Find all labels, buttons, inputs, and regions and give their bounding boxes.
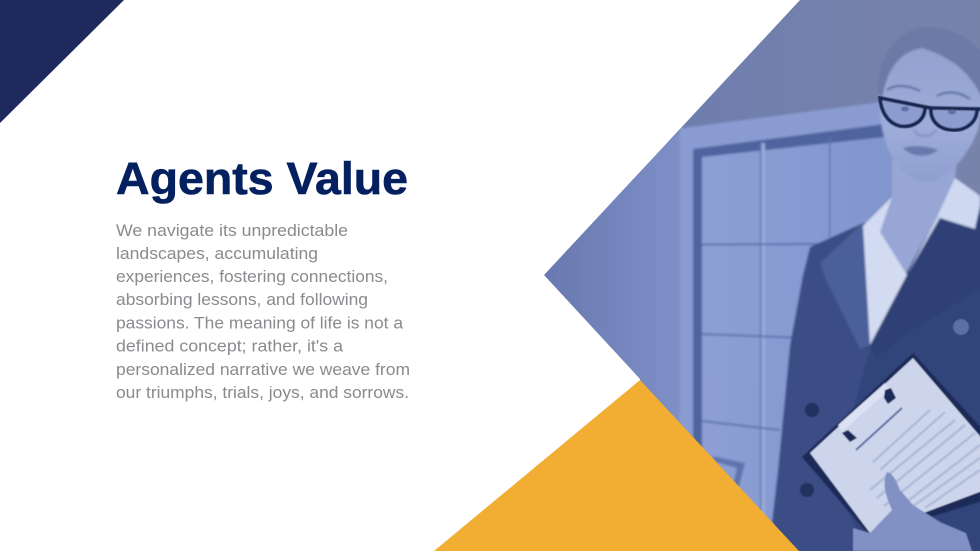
body text: landscapes, accumulating [116, 244, 318, 263]
corner triangle: navy [0, 0, 124, 123]
right lapel [870, 207, 980, 358]
nose [914, 130, 936, 136]
window frame [692, 124, 884, 448]
shirt: left collar [863, 197, 907, 345]
body text: We navigate its unpredictable [116, 221, 348, 240]
body text [116, 221, 410, 402]
photo panel: agent with clipboard, blue duotone [530, 0, 980, 551]
paper [810, 358, 980, 533]
clipboard board [802, 353, 980, 536]
lips [903, 146, 938, 156]
shirt: right collar [937, 178, 980, 229]
neck [876, 155, 957, 275]
window trim [680, 102, 882, 438]
clip [838, 383, 889, 432]
left lapel [820, 224, 870, 348]
window panes [700, 134, 895, 551]
brows [887, 86, 920, 91]
yellow triangle [434, 380, 799, 551]
body text: defined concept; rather, it's a [116, 336, 344, 356]
body text: personalized narrative we weave from [116, 360, 410, 379]
glasses [880, 98, 980, 130]
face [878, 48, 980, 164]
hair [878, 28, 980, 97]
hand [853, 472, 972, 551]
jacket [772, 200, 980, 551]
body text: experiences, fostering connections, [116, 267, 388, 286]
document lines [870, 410, 980, 514]
body text: our triumphs, trials, joys, and sorrows. [116, 383, 409, 402]
body text: passions. The meaning of life is not a [116, 314, 404, 332]
title: Agents Value [116, 153, 408, 204]
body text: absorbing lessons, and following [116, 290, 368, 309]
wall [662, 0, 980, 236]
jacket buttons [953, 319, 969, 335]
